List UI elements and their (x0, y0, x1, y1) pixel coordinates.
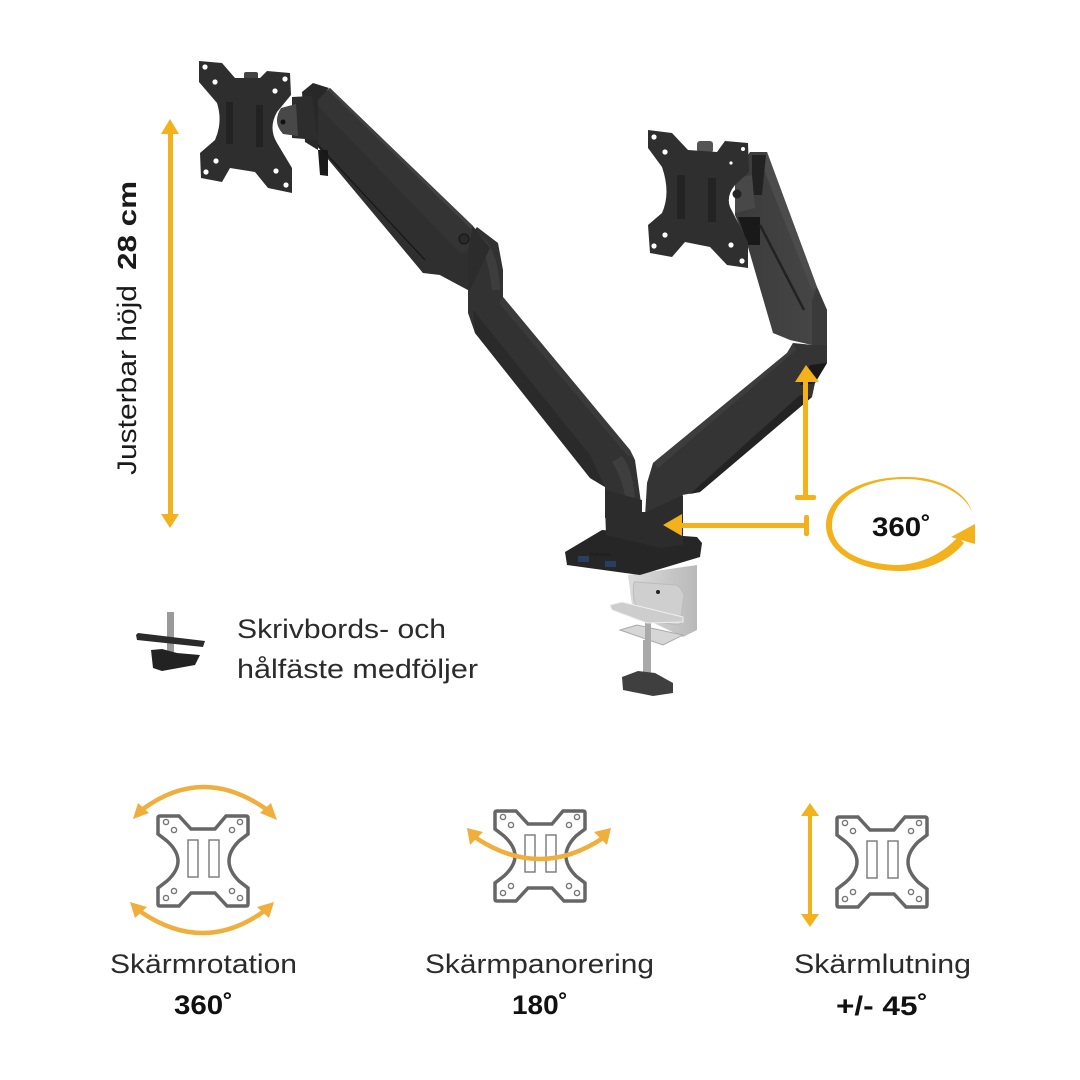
left arm lower segment and column (440, 227, 642, 518)
desk and grommet hardware icon (136, 612, 205, 671)
hardware caption: hålfäste medföljer (237, 654, 478, 684)
right VESA plate (648, 130, 749, 268)
label: screen tilt (794, 949, 971, 1021)
label: screen pan (425, 949, 654, 1020)
vertical text: adjustable height (112, 181, 142, 475)
label: screen tilt: +/- 45˚ (836, 991, 928, 1021)
icon: screen pan (467, 811, 611, 901)
left arm upper segment (302, 83, 490, 290)
clamp: silver bracket (610, 565, 697, 678)
reach arrow vertical (795, 365, 819, 500)
right arm upper segment (735, 152, 827, 345)
vertical text: adjustable height: Justerbar höjd (112, 285, 142, 475)
right arm lower segment and column (645, 340, 827, 517)
label: screen rotation: 360˚ (174, 990, 233, 1020)
rotation ellipse arrow (826, 477, 975, 571)
clamp: knob (622, 671, 673, 696)
hardware caption: Skrivbords- och (237, 614, 446, 644)
label: screen pan: Skärmpanorering (425, 949, 654, 979)
label: screen rotation (110, 949, 297, 1020)
rotation label: 360˚ (872, 512, 931, 542)
left VESA plate (199, 61, 292, 193)
height arrow (161, 119, 179, 528)
vertical text: adjustable height: 28 cm (112, 181, 142, 270)
label: screen tilt: Skärmlutning (794, 949, 971, 979)
product photo: dual monitor arm (199, 61, 827, 696)
right hinge (732, 175, 755, 213)
hardware caption (237, 614, 478, 684)
left hinge (277, 96, 318, 140)
icon: screen tilt (801, 803, 927, 927)
label: screen rotation: Skärmrotation (110, 949, 297, 979)
reach arrow horizontal (663, 514, 809, 536)
icon: screen rotation (130, 787, 277, 933)
base with USB ports (565, 490, 702, 575)
label: screen pan: 180˚ (512, 990, 568, 1020)
base with USB ports: Fellowes (590, 552, 610, 558)
